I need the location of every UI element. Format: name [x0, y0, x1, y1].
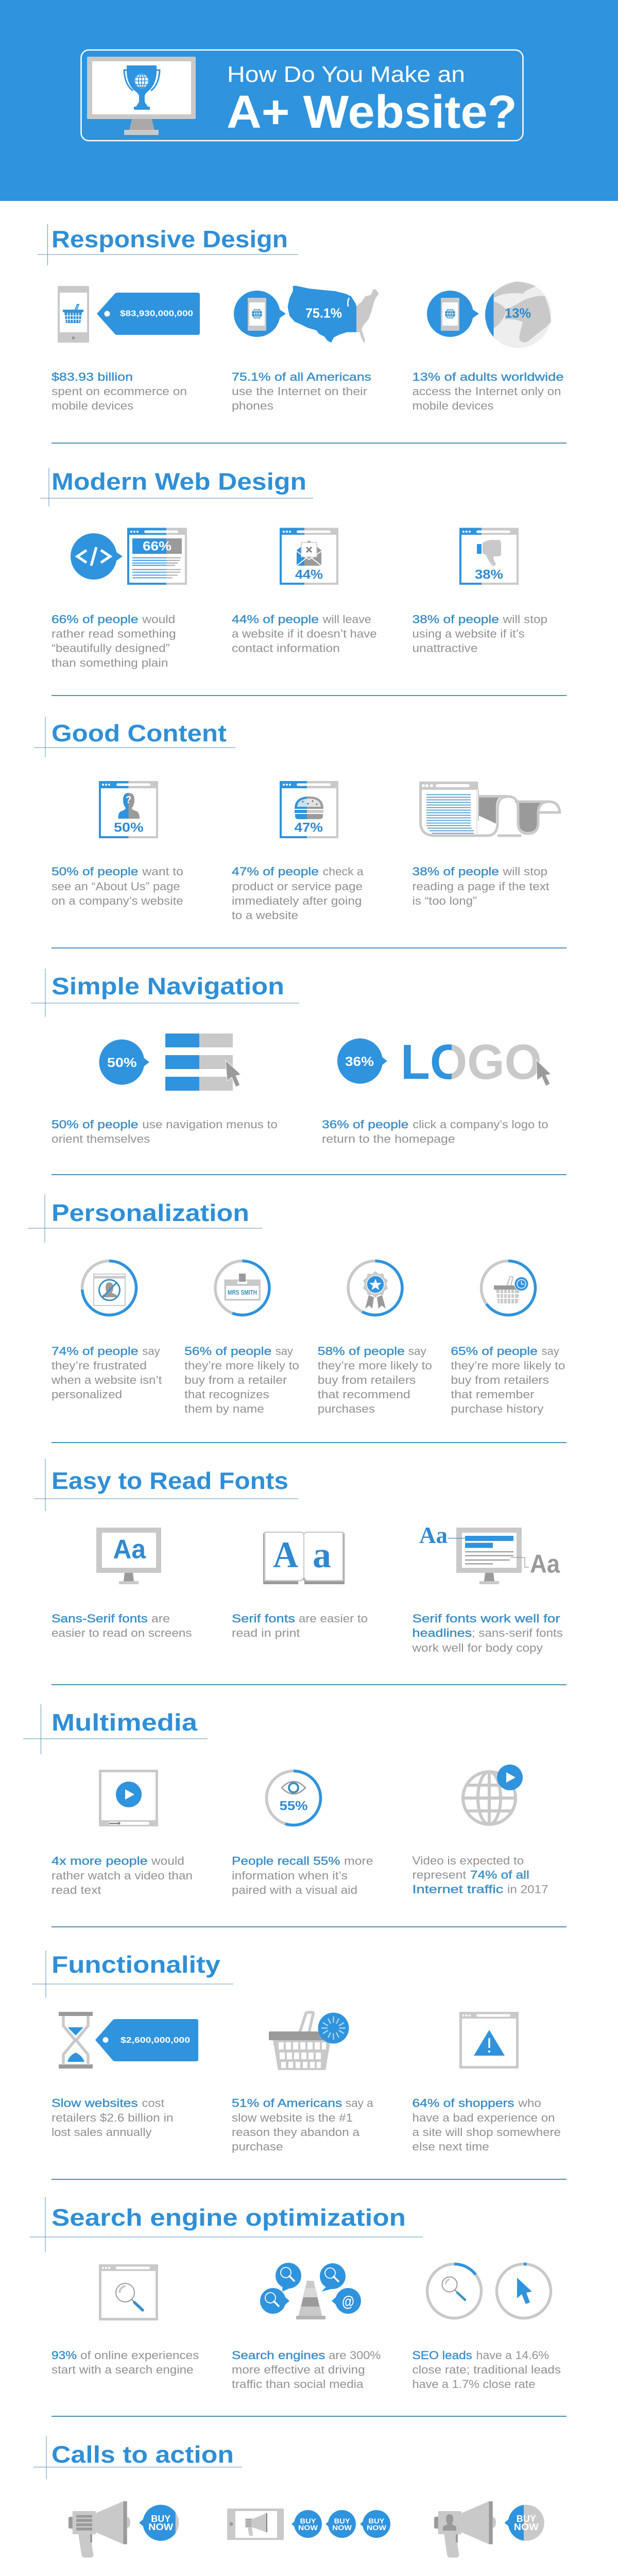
- text: col 3: [412, 613, 547, 655]
- panel: good content: [34, 717, 560, 922]
- text: col 2: [232, 2349, 381, 2391]
- icon: 50% bubble and menu: 50%: [107, 1056, 137, 1070]
- heading: [28, 1194, 262, 1243]
- text: col 3: who: [518, 2097, 541, 2110]
- text: col 3: [412, 1854, 548, 1896]
- panel: modern web design: [40, 468, 547, 669]
- heading: [30, 2197, 423, 2252]
- icon: hourglass and price tag: [59, 2012, 198, 2069]
- text: col 4: they’re more likely to: [451, 1359, 565, 1372]
- text: col 4: 65% of people: [451, 1345, 538, 1358]
- text: col 3: Video is expected to: [412, 1854, 524, 1867]
- text: col 3: buy from retailers: [318, 1374, 416, 1386]
- icon: window with person: ?: [126, 794, 131, 806]
- icon: open book serif: a: [313, 1534, 331, 1575]
- header banner: [0, 0, 618, 201]
- icon: open book serif: A: [273, 1534, 298, 1575]
- panel: personalization: [28, 1194, 565, 1415]
- text: col 3: else next time: [412, 2140, 489, 2153]
- text: col 1: rather watch a video than: [52, 1869, 193, 1882]
- text: col 1: cost: [142, 2097, 164, 2110]
- text: col 1: 74% of people: [52, 1345, 138, 1358]
- icon: megaphone with buy now: BUY: [151, 2514, 170, 2524]
- icon: personalized megaphone with buy now: NOW: [514, 2522, 539, 2532]
- icon: tablet with three buy now bubbles: BUY: [334, 2517, 350, 2525]
- text: col 1: 50% of people: [52, 865, 138, 878]
- heading: Good Content: [52, 720, 227, 747]
- text: col 3: [412, 370, 563, 412]
- text: col 3: Internet traffic: [412, 1883, 503, 1896]
- icon: window with thumbs down: [459, 528, 519, 585]
- heading: [32, 1951, 233, 1997]
- text: col 3: [412, 865, 549, 907]
- icon: two close rate rings: [427, 2264, 551, 2318]
- icon: 50% bubble and menu: [99, 1033, 241, 1091]
- title: [227, 62, 517, 138]
- heading: Calls to action: [52, 2441, 234, 2468]
- text: col 3: [412, 2097, 561, 2153]
- icon: cone with bubbles: @: [342, 2293, 354, 2310]
- heading: Modern Web Design: [52, 468, 306, 495]
- heading: [31, 969, 299, 1017]
- text: col 3: work well for body copy: [411, 1641, 543, 1654]
- text: col 2: say: [276, 1345, 293, 1358]
- icon: globe with play: [463, 1765, 523, 1824]
- heading: Easy to Read Fonts: [52, 1467, 288, 1494]
- text: col 1: want to: [142, 865, 183, 878]
- text: col 1: spent on ecommerce on: [52, 385, 187, 398]
- icon: phone bubble and US map: [234, 285, 379, 344]
- icon: window with person: [99, 781, 158, 838]
- text: col 2: Search engines: [232, 2349, 325, 2362]
- icon: phone bubble and globe: [427, 281, 551, 348]
- text: col 1: [52, 1855, 193, 1896]
- text: col 2: contact information: [232, 642, 340, 655]
- text: col 2: check a: [323, 865, 364, 878]
- text: col 2: product or service page: [232, 880, 363, 893]
- text: col 3: 64% of shoppers: [412, 2097, 514, 2110]
- icon: code bubble and article window: 66%: [143, 539, 171, 553]
- panel: simple navigation: [31, 969, 551, 1145]
- text: col 2: use the Internet on their: [232, 385, 367, 398]
- text: col 2: [322, 1118, 548, 1145]
- text: col 1: start with a search engine: [52, 2363, 194, 2376]
- text: col 2: they’re more likely to: [184, 1359, 299, 1372]
- icon: phone with basket and price tag: [58, 286, 200, 343]
- icon: long scrolling window: [419, 782, 560, 836]
- text: col 2: are easier to: [299, 1612, 368, 1625]
- text: col 2: [184, 1345, 299, 1415]
- icon: window with envelope: 44%: [295, 567, 323, 582]
- text: col 3: is “too long”: [412, 894, 477, 907]
- text: col 1: on a company’s website: [52, 894, 183, 907]
- text: col 1: of online experiences: [80, 2349, 199, 2362]
- panel: functionality: [32, 1951, 561, 2153]
- icon: tablet with three buy now bubbles: NOW: [332, 2523, 352, 2532]
- text: col 1: lost sales annually: [52, 2126, 151, 2139]
- text: col 4: [451, 1345, 565, 1415]
- text: col 2: read in print: [232, 1626, 300, 1639]
- heading: [38, 224, 298, 265]
- icon: tablet with three buy now bubbles: BUY: [300, 2517, 316, 2525]
- text: col 1: retailers $2.6 billion in: [52, 2111, 173, 2124]
- icon: basket with loading spinner: [269, 2012, 349, 2070]
- text: col 3: Serif fonts work well for: [412, 1612, 560, 1625]
- icon: ring with eye 55%: [267, 1771, 320, 1825]
- text: col 3: access the Internet only on: [412, 385, 561, 398]
- icon: monitor sans-serif: Aa: [113, 1534, 146, 1564]
- text: col 3: have a 1.7% close rate: [412, 2378, 535, 2391]
- icon: megaphone with buy now: [68, 2501, 179, 2557]
- text: col 3: mobile devices: [412, 399, 493, 412]
- title: A+ Website?: [227, 87, 517, 138]
- text: col 3: 74% of all: [470, 1868, 529, 1882]
- text: col 3: close rate; traditional leads: [412, 2363, 561, 2376]
- icon: ring 58%: [348, 1261, 402, 1315]
- text: col 1: [51, 1345, 162, 1401]
- text: col 1: they’re frustrated: [52, 1359, 147, 1372]
- text: col 2: a website if it doesn’t have: [232, 628, 377, 640]
- text: col 1: say: [142, 1345, 160, 1358]
- text: col 1: easier to read on screens: [52, 1626, 192, 1639]
- text: col 4: purchase history: [451, 1402, 543, 1415]
- icon: 36% bubble and logo: LOGO: [401, 1035, 542, 1090]
- panel: search engine optimization: [30, 2197, 561, 2391]
- text: col 1: orient themselves: [52, 1132, 150, 1145]
- icon: tablet with three buy now bubbles: NOW: [367, 2523, 387, 2532]
- icon: monitor headline and body: Aa: [530, 1550, 560, 1579]
- text: col 2: [232, 865, 364, 922]
- text: col 2: [232, 2097, 373, 2153]
- icon: megaphone with buy now: NOW: [148, 2522, 173, 2532]
- text: col 2: slow website is the #1: [232, 2111, 353, 2124]
- text: col 2: [232, 370, 371, 412]
- icon: monitor headline and body: [419, 1522, 560, 1584]
- icon: 36% bubble and logo: 36%: [345, 1055, 374, 1069]
- text: col 3: a site will shop somewhere: [412, 2126, 561, 2139]
- icon: tablet with three buy now bubbles: NOW: [298, 2523, 318, 2532]
- title box: [81, 50, 523, 141]
- icon: ring 74%: [82, 1261, 136, 1315]
- heading: Personalization: [52, 1199, 249, 1226]
- text: col 2: Serif fonts: [232, 1612, 295, 1625]
- text: col 1: [52, 1118, 278, 1145]
- icon: cone with bubbles: [260, 2263, 361, 2319]
- text: col 3: reading a page if the text: [412, 880, 549, 893]
- text: col 3: headlines: [412, 1626, 472, 1639]
- text: col 1: [52, 613, 176, 669]
- text: col 3: 13% of adults worldwide: [412, 370, 563, 383]
- heading: [33, 2436, 242, 2479]
- text: col 3: SEO leads: [412, 2349, 472, 2362]
- text: col 3: have a bad experience on: [412, 2111, 555, 2124]
- text: col 3: purchases: [318, 1402, 375, 1415]
- icon: window with warning: [459, 2012, 519, 2067]
- text: col 3: in 2017: [507, 1883, 548, 1896]
- text: col 1: use navigation menus to: [142, 1118, 278, 1131]
- heading: [34, 1459, 298, 1511]
- icon: code bubble and article window: [71, 528, 187, 585]
- text: col 1: 4x more people: [52, 1855, 148, 1868]
- text: col 2: 47% of people: [232, 865, 319, 878]
- text: col 3: that recommend: [318, 1388, 410, 1401]
- text: col 1: $83.93 billion: [52, 370, 133, 383]
- text: col 2: will leave: [322, 613, 371, 625]
- icon: phone with basket and price tag: $83,930,000,000: [120, 309, 193, 318]
- text: col 1: [52, 2349, 199, 2376]
- text: col 1: [52, 370, 187, 412]
- text: col 1: would: [142, 613, 175, 625]
- text: col 1: [52, 865, 183, 907]
- text: col 2: that recognizes: [184, 1388, 269, 1401]
- heading: Simple Navigation: [52, 973, 284, 999]
- text: col 1: are: [151, 1612, 170, 1625]
- text: col 2: phones: [232, 399, 273, 412]
- icon: phone bubble and US map: 75.1%: [305, 305, 342, 320]
- text: col 4: say: [542, 1345, 559, 1358]
- text: col 2: 56% of people: [184, 1345, 271, 1358]
- icon: ring 56%: MRS SMITH: [228, 1289, 257, 1296]
- text: col 2: 75.1% of all Americans: [232, 370, 371, 383]
- heading: Search engine optimization: [52, 2204, 406, 2231]
- text: col 1: see an “About Us” page: [52, 880, 180, 893]
- icon: tablet with three buy now bubbles: BUY: [369, 2517, 385, 2525]
- text: col 1: would: [151, 1855, 184, 1868]
- text: col 2: purchase: [232, 2140, 283, 2153]
- icon: open book serif: [263, 1532, 345, 1584]
- text: col 1: “beautifully designed”: [52, 642, 170, 655]
- text: col 1: than something plain: [52, 656, 168, 669]
- text: col 3: say: [408, 1345, 426, 1358]
- text: col 2: [232, 613, 377, 655]
- text: col 1: read text: [52, 1884, 101, 1896]
- text: col 3: [411, 1612, 563, 1654]
- text: col 1: when a website isn’t: [51, 1374, 162, 1386]
- icon: ring with eye 55%: 55%: [280, 1799, 308, 1814]
- heading: Multimedia: [52, 1709, 197, 1736]
- text: col 3: using a website if it’s: [412, 628, 524, 640]
- text: col 2: say a: [346, 2097, 373, 2110]
- icon: video window: [99, 1771, 158, 1826]
- text: col 2: 51% of Americans: [232, 2097, 342, 2110]
- icon: window with burger: 47%: [295, 820, 323, 835]
- icon: tablet with three buy now bubbles: [227, 2509, 390, 2540]
- text: col 3: ; sans-serif fonts: [472, 1626, 563, 1639]
- text: col 3: 38% of people: [412, 613, 499, 625]
- icon: ring 65%: [481, 1261, 536, 1315]
- text: col 1: Slow websites: [52, 2097, 138, 2110]
- text: col 3: 58% of people: [318, 1345, 405, 1358]
- icon: monitor headline and body: Aa: [419, 1522, 448, 1548]
- text: col 2: 36% of people: [322, 1118, 408, 1131]
- text: col 3: unattractive: [412, 642, 478, 655]
- text: col 1: 50% of people: [52, 1118, 138, 1131]
- text: col 1: 93%: [52, 2349, 77, 2362]
- title: How Do You Make an: [227, 62, 465, 87]
- icon: window with burger: [280, 781, 338, 838]
- text: col 3: they’re more likely to: [318, 1359, 432, 1372]
- text: col 3: [318, 1345, 432, 1415]
- text: col 1: rather read something: [52, 628, 176, 640]
- panel: responsive design: [38, 224, 563, 412]
- text: col 1: [52, 2097, 173, 2139]
- text: col 2: are 300%: [329, 2349, 381, 2362]
- text: col 3: will stop: [502, 613, 547, 625]
- text: col 2: click a company’s logo to: [413, 1118, 548, 1131]
- text: col 2: information when it’s: [232, 1869, 348, 1882]
- text: col 3: represent: [412, 1868, 466, 1882]
- text: col 2: 44% of people: [232, 613, 319, 625]
- icon: phone bubble and globe: 13%: [505, 305, 531, 320]
- text: col 4: buy from retailers: [451, 1374, 549, 1386]
- text: col 2: People recall 55%: [232, 1855, 340, 1868]
- text: col 1: mobile devices: [52, 399, 133, 412]
- text: col 2: more: [344, 1855, 373, 1868]
- text: col 3: have a 14.6%: [476, 2349, 549, 2362]
- icon: monitor sans-serif: [96, 1528, 161, 1584]
- heading: [23, 1704, 208, 1754]
- icon: monitor with trophy: [87, 57, 196, 135]
- panel: multimedia: [23, 1704, 548, 1896]
- text: col 1: [52, 1612, 192, 1639]
- text: col 2: reason they abandon a: [232, 2126, 360, 2139]
- icon: personalized megaphone with buy now: [434, 2501, 544, 2557]
- icon: window with thumbs down: 38%: [475, 567, 503, 582]
- heading: [40, 468, 313, 506]
- icon: ring 56%: [215, 1261, 269, 1315]
- heading: Responsive Design: [52, 226, 288, 252]
- icon: window with person: 50%: [114, 820, 144, 835]
- text: col 4: that remember: [451, 1388, 534, 1401]
- text: col 3: [412, 2349, 561, 2391]
- text: col 2: return to the homepage: [322, 1132, 455, 1145]
- icon: window with envelope: [280, 528, 338, 585]
- text: col 2: them by name: [184, 1402, 264, 1415]
- text: col 3: will stop: [502, 865, 547, 878]
- text: col 1: 66% of people: [52, 613, 138, 625]
- text: col 2: buy from a retailer: [184, 1374, 287, 1386]
- icon: window with magnifier: [99, 2264, 158, 2319]
- icon: hourglass and price tag: $2,600,000,000: [121, 2036, 190, 2045]
- text: col 2: immediately after going: [232, 894, 362, 907]
- text: col 1: personalized: [52, 1388, 122, 1401]
- icon: personalized megaphone with buy now: BUY: [517, 2514, 536, 2524]
- panel: calls to action: [33, 2436, 559, 2576]
- heading: [34, 717, 235, 757]
- text: col 2: [232, 1855, 373, 1896]
- text: col 2: paired with a visual aid: [232, 1884, 357, 1896]
- text: col 3: 38% of people: [412, 865, 499, 878]
- text: col 1: Sans-Serif fonts: [52, 1612, 148, 1625]
- text: col 2: traffic than social media: [232, 2378, 364, 2391]
- panel: easy to read fonts: [34, 1459, 563, 1654]
- icon: 36% bubble and logo: [337, 1035, 551, 1090]
- text: col 2: [232, 1612, 368, 1639]
- text: col 2: more effective at driving: [232, 2363, 365, 2376]
- heading: Functionality: [52, 1951, 220, 1978]
- text: col 2: to a website: [232, 909, 298, 922]
